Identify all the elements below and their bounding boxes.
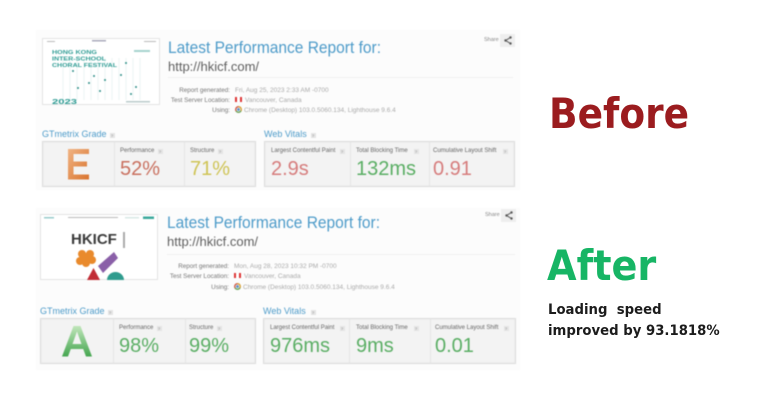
- thumbnail: HKICF site after: HKICF: [71, 231, 117, 248]
- structure score: [190, 146, 230, 180]
- label: after: After: [547, 241, 656, 290]
- panel: before report: [42, 34, 516, 188]
- panel: after report: ?: [109, 310, 111, 314]
- metric: CLS: [434, 324, 509, 357]
- metric: LCP: ?: [341, 148, 343, 154]
- thumbnail: festival site before: HONG KONG: [52, 50, 97, 56]
- performance score: 52%: [120, 158, 160, 180]
- metric: LCP: 976ms: [270, 335, 330, 357]
- report metadata: before: Fri, Aug 25, 2023 2:33 AM -0700: [235, 87, 329, 94]
- thumbnail: HKICF site after: [40, 214, 158, 281]
- panel: before report: ?: [312, 132, 314, 138]
- structure score: ?: [219, 148, 221, 154]
- url: before: http://hkicf.com/: [168, 59, 259, 74]
- metric: CLS: Cumulative Layout Shift: [433, 148, 496, 154]
- report metadata: after: [170, 262, 395, 291]
- metric: TBT: ?: [415, 148, 417, 154]
- panel: before report: ?: [111, 132, 113, 138]
- metric: CLS: Cumulative Layout Shift: [435, 325, 498, 331]
- report metadata: before: Test Server Location:: [171, 97, 230, 104]
- panel: after report: ?: [312, 310, 314, 314]
- panel: after report: [40, 209, 516, 364]
- structure score: 71%: [190, 158, 230, 180]
- metric: LCP: [270, 324, 345, 357]
- heading: gtmetrix grade before: GTmetrix Grade: [42, 129, 107, 139]
- structure score: [188, 324, 229, 357]
- metric: LCP: 2.9s: [271, 158, 309, 180]
- metric: CLS: [432, 146, 508, 180]
- title: before: Latest Performance Report for:: [168, 38, 381, 57]
- thumbnail: festival site before: CHORAL FESTIVAL: [52, 63, 118, 69]
- report metadata: before: [170, 86, 396, 114]
- metric: LCP: Largest Contentful Paint: [270, 325, 334, 331]
- heading: gtmetrix grade after: GTmetrix Grade: [40, 306, 105, 316]
- report metadata: after: Mon, Aug 28, 2023 10:32 PM -0700: [234, 263, 337, 270]
- panel: grade scores before: [42, 141, 256, 187]
- metric: TBT: [356, 146, 419, 180]
- performance score: ?: [158, 326, 160, 330]
- report metadata: after: Test Server Location:: [170, 273, 229, 280]
- structure score: Structure: [190, 148, 214, 154]
- share button: after: [485, 209, 516, 222]
- metric: TBT: ?: [415, 326, 417, 330]
- performance score: Performance: [119, 325, 153, 331]
- share button: before: [484, 34, 515, 47]
- text: loading speed improvement: [548, 302, 720, 339]
- report metadata: after: Vancouver, Canada: [244, 273, 301, 280]
- text: loading speed improvement: improved by 93.1818%: [548, 323, 720, 339]
- metric: LCP: [270, 146, 345, 180]
- text: loading speed improvement: Loading speed: [548, 302, 662, 318]
- metric: CLS: ?: [505, 326, 507, 330]
- share button: after: Share: [485, 212, 500, 218]
- metric: CLS: 0.91: [433, 158, 472, 180]
- performance score: Performance: [120, 148, 154, 154]
- structure score: ?: [218, 326, 220, 330]
- metric: TBT: Total Blocking Time: [356, 148, 408, 154]
- metric: CLS: 0.01: [435, 335, 474, 357]
- label: before: Before: [549, 89, 689, 138]
- url: after: http://hkicf.com/: [167, 234, 258, 249]
- metric: TBT: [356, 324, 419, 357]
- report metadata: after: Using:: [211, 284, 229, 291]
- metric: LCP: ?: [341, 326, 343, 330]
- heading: web vitals before: Web Vitals: [264, 129, 307, 139]
- heading: web vitals after: Web Vitals: [263, 306, 306, 316]
- performance score: [118, 324, 162, 357]
- grade letter A: [62, 326, 92, 358]
- structure score: Structure: [189, 325, 213, 331]
- panel: web vitals before: [264, 141, 515, 187]
- metric: TBT: 9ms: [356, 335, 394, 357]
- thumbnail: festival site before: [42, 38, 160, 105]
- metric: TBT: 132ms: [356, 158, 416, 180]
- report metadata: before: Chrome (Desktop) 103.0.5060.134, Lighthouse 9.6.4: [244, 107, 396, 114]
- title: after: Latest Performance Report for:: [167, 213, 380, 232]
- performance score: 98%: [119, 335, 159, 357]
- metric: CLS: ?: [504, 148, 506, 154]
- performance score: [120, 146, 163, 180]
- metric: TBT: Total Blocking Time: [356, 325, 408, 331]
- metric: LCP: Largest Contentful Paint: [271, 148, 335, 154]
- share button: before: Share: [484, 37, 499, 43]
- grade letter E: [67, 148, 90, 180]
- panel: grade scores after: [40, 318, 256, 364]
- report metadata: before: Using:: [212, 107, 230, 114]
- report metadata: after: Report generated:: [178, 263, 229, 270]
- panel: web vitals after: [263, 318, 516, 364]
- thumbnail: festival site before: INTER-SCHOOL: [52, 56, 107, 62]
- structure score: 99%: [189, 335, 229, 357]
- performance score: ?: [159, 148, 161, 154]
- report metadata: after: Chrome (Desktop) 103.0.5060.134, Lighthouse 9.6.4: [243, 284, 395, 291]
- report metadata: before: Report generated:: [179, 87, 230, 94]
- report metadata: before: Vancouver, Canada: [245, 97, 302, 104]
